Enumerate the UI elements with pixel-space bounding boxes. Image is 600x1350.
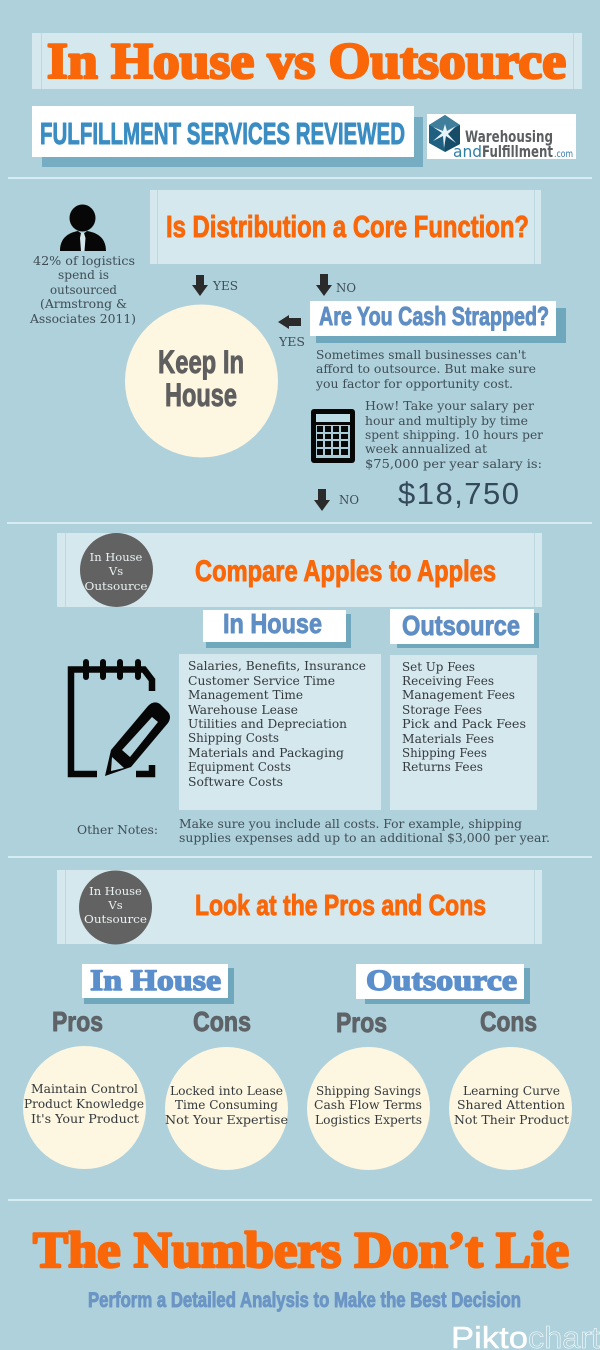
text: how to calculate [365,399,543,471]
panel: outsource cost list [390,655,537,810]
heading: Look at the Pros and Cons [195,890,486,922]
label box: in house [82,964,234,1004]
stat text: 42 percent: outsourced [50,283,117,297]
badge: in house vs outsource: In House [89,884,142,898]
arrow: yes left [278,315,301,329]
circle: outsource cons: Shared Attention [457,1098,565,1112]
panel: pros and cons [57,870,542,944]
panel: in house cost list: Materials and Packaging [188,746,344,760]
other notes text: Make sure you include all costs. For example, shipping [179,817,522,831]
panel: outsource cost list: Returns Fees [402,760,483,774]
label box: in house costs [203,608,351,648]
panel: in house cost list: Equipment Costs [188,760,291,774]
circle: in house pros [23,1046,146,1169]
other notes text [179,817,550,845]
logo text [453,127,573,161]
other notes text: supplies expenses add up to an additional $3,000 per year. [179,831,550,845]
circle: keep in house [125,304,278,458]
panel: in house cost list: Shipping Costs [188,731,279,745]
arrow: yes down [192,275,208,296]
panel: in house cost list: Salaries, Benefits, Insurance [188,659,366,673]
badge: in house vs outsource [79,870,152,944]
panel: in house cost list: Utilities and Depreciation [188,717,347,731]
panel: compare apples to apples [57,533,542,607]
question panel: core function [150,190,541,264]
badge: in house vs outsource [80,533,153,607]
circle: outsource pros: Logistics Experts [315,1113,422,1127]
icon: cube [429,115,460,152]
text: how to calculate: week annualized at [365,442,487,456]
circle: in house pros: It's Your Product [31,1112,139,1126]
figure: 18,750: $18,750 [398,476,519,511]
banner: cash strapped [310,301,566,343]
icon: notepad and pencil [71,662,170,776]
badge: in house vs outsource: Vs [107,898,123,912]
stat text: 42 percent: Associates 2011) [29,312,136,326]
circle: keep in house: Keep In [158,344,244,380]
text: how to calculate: spent shipping. 10 hours per [365,428,543,442]
circle: in house pros: Maintain Control [31,1082,138,1096]
label box: in house costs: In House [223,608,322,639]
text: small businesses [315,348,536,391]
stat text: 42 percent: (Armstrong & [40,297,127,311]
badge: in house vs outsource: Vs [108,564,123,578]
panel: in house cost list [179,654,381,810]
text: how to calculate: $75,000 per year salary is: [365,457,542,471]
label: in house pros: Pros [52,1006,103,1037]
panel: outsource cost list: Materials Fees [402,732,494,746]
circle: in house pros: Product Knowledge [24,1097,144,1111]
text: small businesses: afford to outsource. But make sure [316,362,536,376]
label: no 2: NO [339,493,359,507]
label: yes left: YES [278,335,305,349]
panel: in house cost list: Warehouse Lease [188,703,298,717]
panel: outsource cost list: Receiving Fees [402,674,494,688]
text: small businesses: Sometimes small businesses can't [316,348,526,362]
text: how to calculate: How! Take your salary per [365,399,534,413]
label box: in house: In House [90,964,221,997]
text: how to calculate: hour and multiply by time [365,414,528,428]
circle: in house cons [165,1047,288,1170]
label: outsource pros: Pros [336,1007,387,1038]
title: In House vs Outsource [47,34,566,90]
arrow: no down [316,274,332,296]
logo text: .com [554,149,573,160]
stat text: 42 percent [29,254,136,326]
piktochart watermark [451,1320,600,1350]
heading: Compare Apples to Apples [195,555,496,588]
label box: outsource costs: Outsource [402,610,520,641]
badge: in house vs outsource: In House [90,550,143,564]
label: yes: YES [212,279,238,293]
closing headline: The Numbers Don’t Lie [33,1223,569,1279]
badge: in house vs outsource: Outsource [84,579,148,593]
icon: calculator [311,409,355,463]
label: outsource cons: Cons [480,1006,537,1037]
logo text: and [453,142,482,161]
circle: keep in house: House [165,377,237,413]
badge: in house vs outsource: Outsource [84,912,147,926]
subtitle banner [32,106,423,167]
circle: in house cons: Time Consuming [175,1098,278,1112]
stat text: 42 percent: spend is [58,268,109,282]
icon: business person [60,204,106,251]
logo: Warehousing and Fulfillment [427,114,576,161]
circle: outsource cons [449,1047,572,1170]
arrow: no down 2 [314,489,330,511]
panel: outsource cost list: Shipping Fees [402,746,487,760]
panel: outsource cost list: Management Fees [402,688,515,702]
panel: in house cost list: Software Costs [188,775,283,789]
circle: outsource cons: Not Their Product [454,1113,569,1127]
other notes label: Other Notes: [77,823,158,837]
panel: outsource cost list: Pick and Pack Fees [402,717,526,731]
label: no: NO [336,281,356,295]
label: in house cons: Cons [193,1006,251,1037]
panel: in house cost list: Customer Service Time [188,674,335,688]
panel: outsource cost list: Set Up Fees [402,660,475,674]
logo text: Fulfillment [482,142,553,161]
text: small businesses: you factor for opportunity cost. [315,377,513,391]
panel: outsource cost list: Storage Fees [402,703,482,717]
circle: outsource pros: Shipping Savings [316,1084,421,1098]
circle: in house cons: Not Your Expertise [165,1113,288,1127]
logo text: Warehousing [465,127,553,146]
label box: outsource: Outsource [366,964,517,997]
panel: in house cost list: Management Time [188,688,303,702]
circle: outsource pros: Cash Flow Terms [314,1098,422,1112]
circle: in house cons: Locked into Lease [170,1084,283,1098]
circle: outsource cons: Learning Curve [463,1084,560,1098]
stat text: 42 percent: 42% of logistics [33,254,135,268]
subtitle: FULFILLMENT SERVICES REVIEWED [40,116,405,151]
title panel [32,33,582,90]
circle: outsource pros [307,1047,430,1170]
label box: outsource [356,964,530,1004]
